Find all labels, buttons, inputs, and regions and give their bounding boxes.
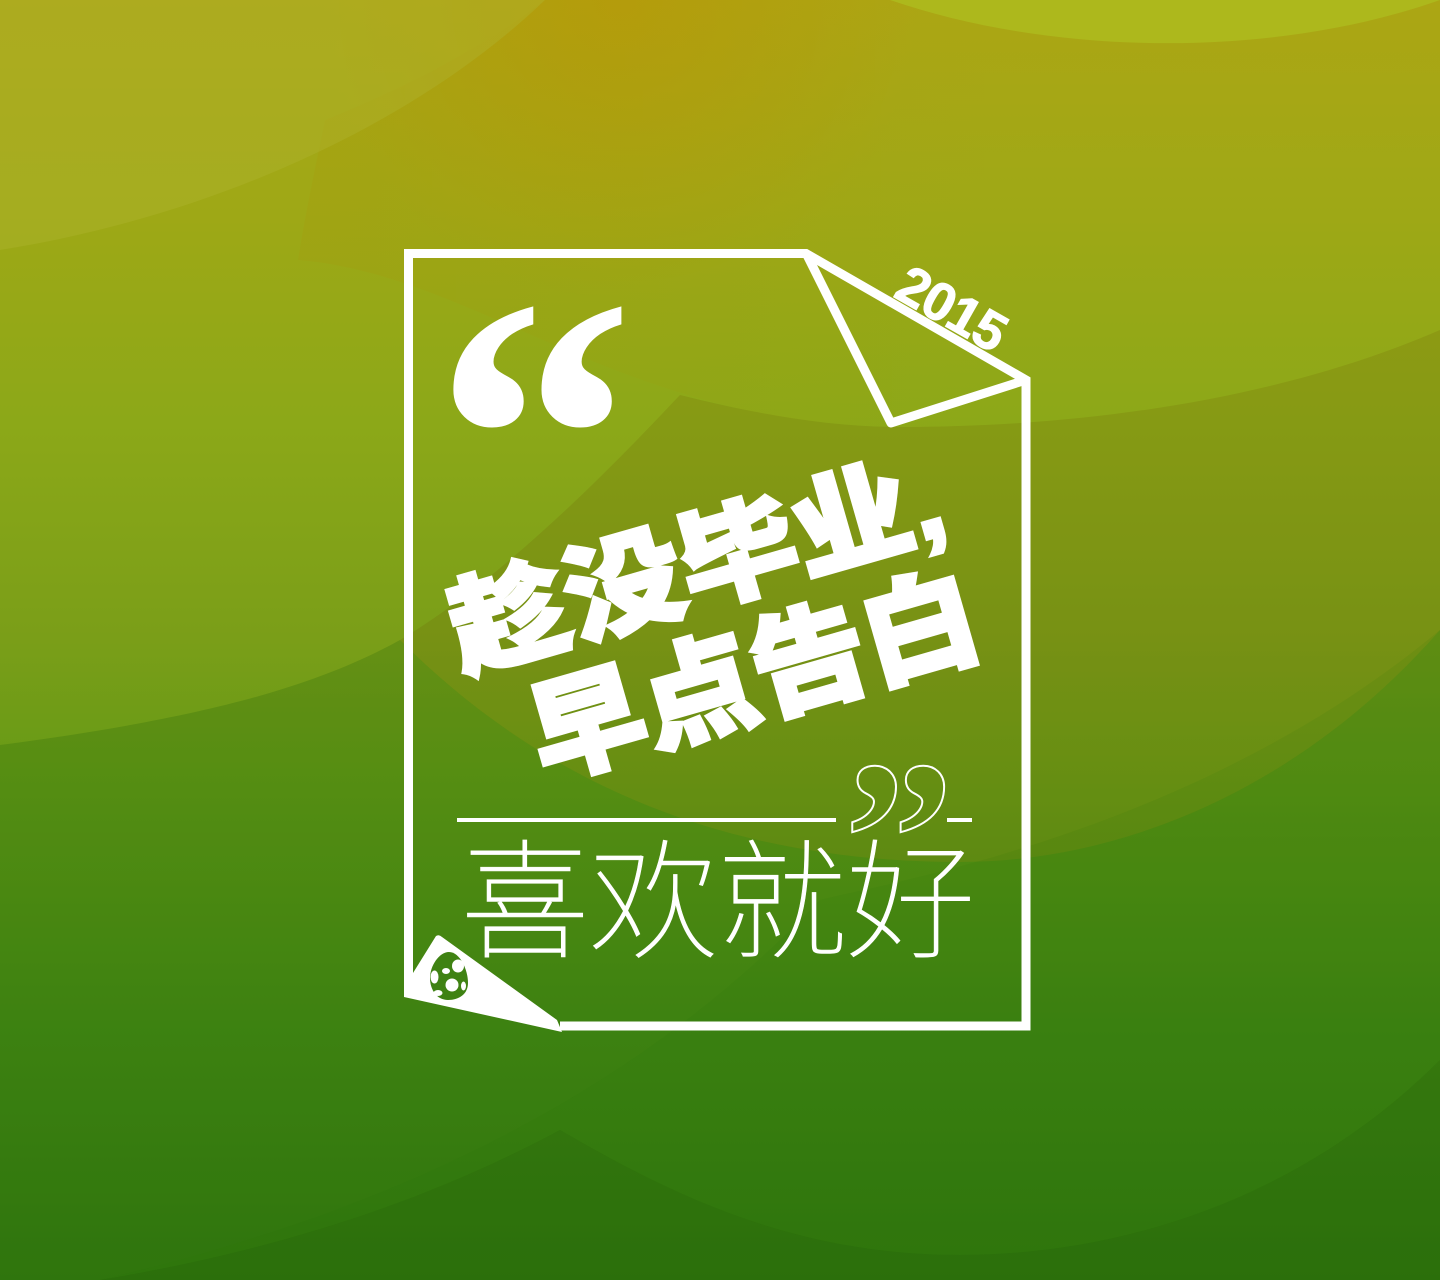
closing quotation mark outline: ” (844, 716, 954, 960)
folded bottom-left corner (404, 935, 562, 1032)
headline line 1: 趁没毕业, (436, 438, 958, 695)
headline line 2: 早点告白 (515, 554, 993, 802)
folded top-right corner (806, 253, 1026, 423)
divider with closing quotation mark (457, 716, 972, 960)
opening quotation mark: “ (434, 216, 634, 660)
headline (436, 438, 993, 802)
year label 2015: 2015 (886, 254, 1017, 364)
subtitle: 喜欢就好 (460, 830, 976, 976)
icon: spotted egg (430, 952, 468, 1000)
page frame with folded corners (408, 253, 1026, 1026)
